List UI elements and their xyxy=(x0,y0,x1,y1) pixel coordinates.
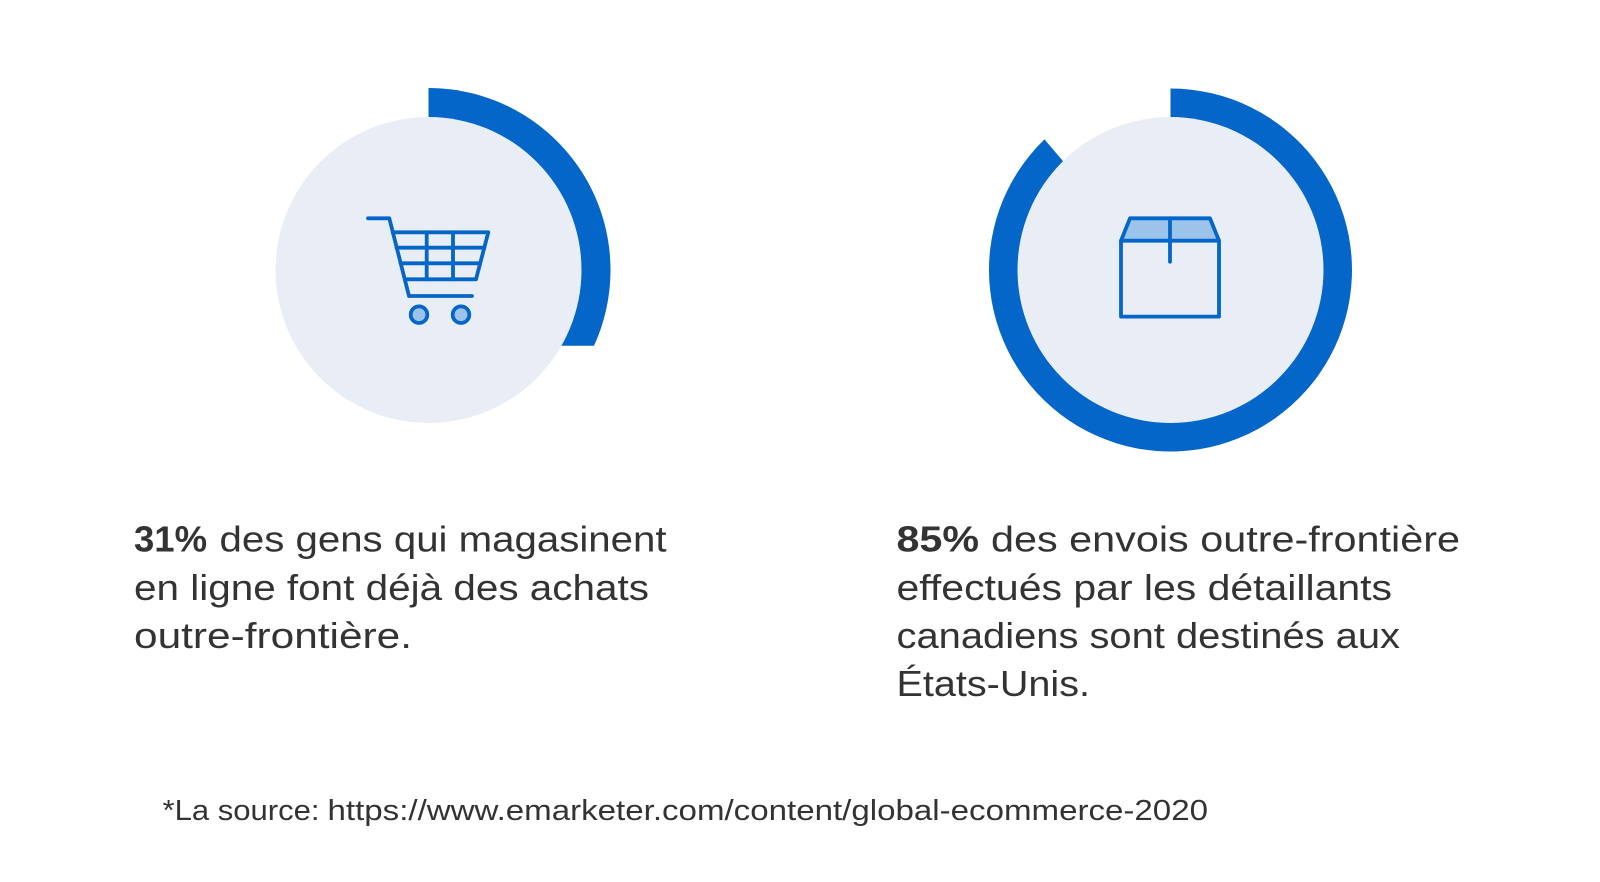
text: 85% statistic: effectués par les détaillants xyxy=(896,567,1392,608)
text: 85% statistic: canadiens sont destinés aux xyxy=(896,615,1400,656)
text: 31% statistic: en ligne font déjà des achats xyxy=(134,567,649,608)
donut chart: 85% xyxy=(989,88,1352,452)
text: 85% statistic: 85% xyxy=(896,519,979,560)
text: source footnote: https://www.emarketer.com/content/global-ecommerce-2020 xyxy=(328,795,1208,827)
text: 85% statistic: États-Unis. xyxy=(896,663,1090,704)
text: 31% statistic xyxy=(134,519,666,656)
text: 31% statistic: des gens qui magasinent xyxy=(220,519,666,560)
panel: online shoppers statistic xyxy=(134,88,666,656)
text: 85% statistic: des envois outre-frontière xyxy=(991,519,1460,560)
text: 31% statistic: outre-frontière. xyxy=(134,615,412,656)
text: 31% statistic: 31% xyxy=(134,519,207,560)
panel: US-bound shipments statistic xyxy=(896,88,1460,704)
text: source footnote: *La source: xyxy=(162,795,320,827)
icon: cardboard box xyxy=(1121,218,1219,317)
text: 85% statistic xyxy=(896,519,1460,704)
icon: shopping cart xyxy=(368,218,488,323)
donut chart: 31% xyxy=(276,88,610,423)
